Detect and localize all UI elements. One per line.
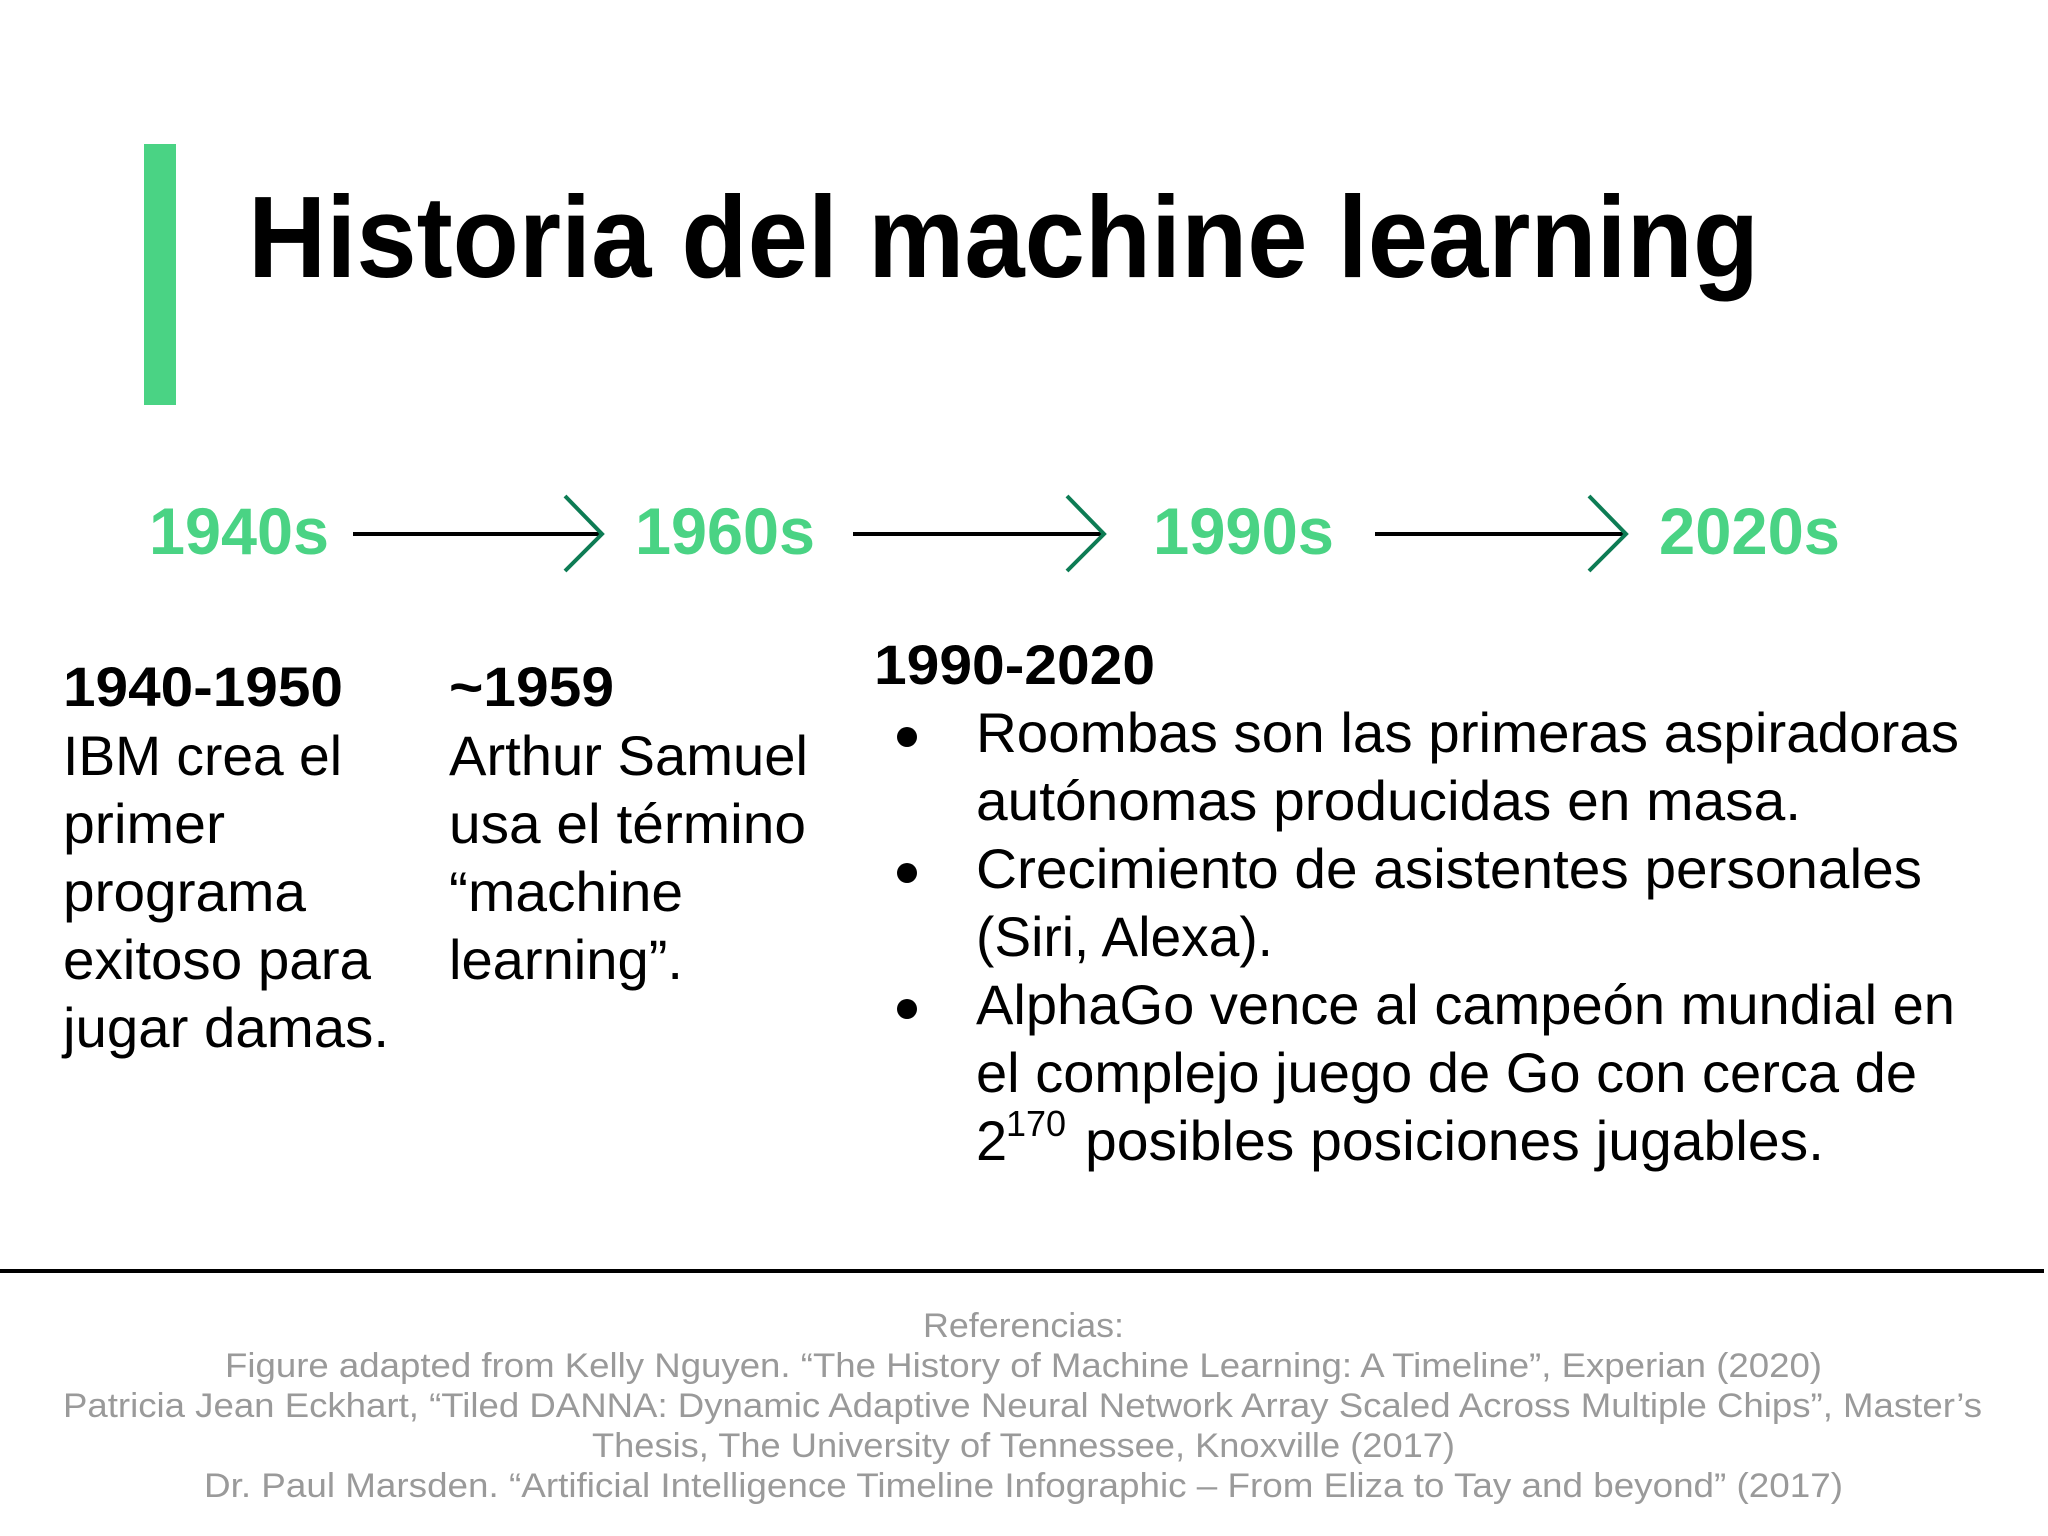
column: 1940-1950: exitoso para [63, 928, 372, 991]
references: Figure adapted from Kelly Nguyen. “The History of Machine Learning: A Timeline”, Experian (2020) [225, 1347, 1822, 1385]
references: Patricia Jean Eckhart, “Tiled DANNA: Dynamic Adaptive Neural Network Array Scaled Across Multiple Chips”, Master’s [63, 1387, 1982, 1425]
bullet 1 [897, 701, 1959, 832]
column: 1940-1950 [61, 655, 389, 1059]
column: 1959: ~1959 [449, 655, 614, 718]
column: 1990-2020: 1990-2020 [874, 633, 1155, 696]
timeline [149, 494, 1840, 571]
column: 1940-1950: IBM crea el [63, 724, 342, 787]
bullet 1: Roombas son las primeras aspiradoras [976, 701, 1959, 764]
column: 1940-1950: 1940-1950 [63, 655, 343, 718]
decade: 1940s: 1940s [149, 494, 329, 568]
column: 1959: Arthur Samuel [449, 724, 808, 787]
column: 1940-1950: primer [63, 792, 225, 855]
column: 1959 [449, 655, 808, 991]
arrow 2 [853, 496, 1104, 571]
arrow 1 [353, 496, 602, 571]
bullet 3: AlphaGo vence al campeón mundial en [976, 973, 1955, 1036]
bullet 3: 170 [1006, 1103, 1066, 1144]
decade: 1990s: 1990s [1153, 494, 1334, 568]
decade: 1960s: 1960s [635, 494, 815, 568]
references [63, 1307, 1982, 1505]
bullet 2: (Siri, Alexa). [976, 905, 1273, 968]
references: Dr. Paul Marsden. “Artificial Intelligence Timeline Infographic – From Eliza to Tay and beyond” (2017) [204, 1467, 1843, 1505]
references: Thesis, The University of Tennessee, Knoxville (2017) [592, 1427, 1455, 1465]
bullet 1: autónomas producidas en masa. [976, 769, 1801, 832]
column: 1940-1950: jugar damas. [61, 996, 389, 1059]
column: 1959: learning”. [449, 928, 683, 991]
column: 1959: “machine [449, 860, 683, 923]
bullet 2: Crecimiento de asistentes personales [976, 837, 1922, 900]
column: 1990-2020 [874, 633, 1959, 1172]
bullet 2 [897, 837, 1922, 968]
bullet 3: 2 [976, 1109, 1007, 1172]
references: Referencias: [923, 1307, 1124, 1345]
bullet 3: posibles posiciones jugables. [1085, 1109, 1824, 1172]
column: 1940-1950: programa [63, 860, 307, 923]
bullet 3 [897, 973, 1955, 1172]
title: Historia del machine learning [248, 172, 1759, 302]
column: 1959: usa el término [449, 792, 806, 855]
accent bar [144, 144, 176, 405]
bullet 3: el complejo juego de Go con cerca de [976, 1041, 1917, 1104]
arrow 3 [1375, 496, 1626, 571]
divider [0, 1269, 2044, 1273]
decade: 2020s: 2020s [1659, 494, 1840, 568]
